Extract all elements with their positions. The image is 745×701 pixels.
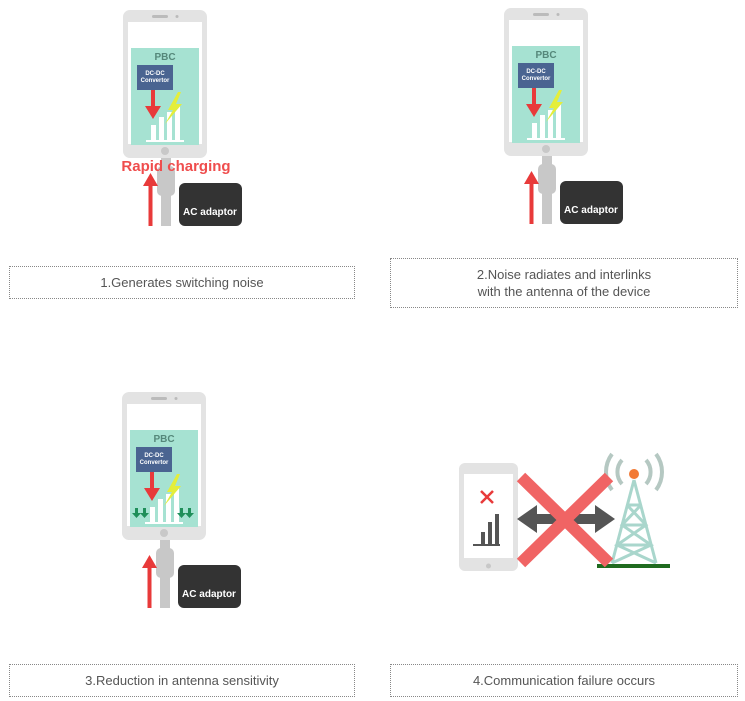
caption 3: 3.Reduction in antenna sensitivity xyxy=(85,673,279,688)
caption 4 xyxy=(390,664,738,697)
phone xyxy=(459,463,518,571)
caption 1: 1.Generates switching noise xyxy=(100,275,264,290)
tower xyxy=(612,480,656,563)
arrow xyxy=(517,505,615,533)
label: rapid charging: Rapid charging xyxy=(121,158,231,175)
caption 2 xyxy=(390,258,738,308)
caption 2: 2.Noise radiates and interlinks xyxy=(477,267,651,282)
panel 1 illustration xyxy=(121,10,242,226)
panel 4 illustration xyxy=(459,454,670,571)
panel 2 illustration xyxy=(504,8,623,224)
caption 4: 4.Communication failure occurs xyxy=(473,673,655,688)
icon: green down arrows xyxy=(132,508,194,518)
red X xyxy=(521,477,609,563)
caption 1 xyxy=(9,266,355,299)
caption 3 xyxy=(9,664,355,697)
caption 2: with the antenna of the device xyxy=(478,284,650,299)
panel 3 illustration xyxy=(122,392,241,608)
